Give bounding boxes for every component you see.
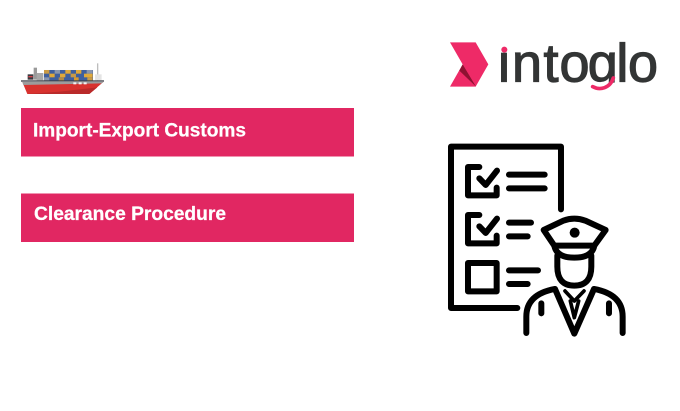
checklist row 2 — [468, 215, 531, 243]
logo: intoglo — [450, 34, 658, 97]
banner: clearance procedure — [21, 194, 354, 242]
checklist sheet — [451, 147, 561, 308]
logo mark: chevron — [450, 42, 488, 87]
officer body — [526, 289, 623, 334]
checklist row 3 — [468, 263, 538, 291]
heading line 2: Clearance Procedure — [34, 204, 226, 225]
officer face — [557, 256, 591, 286]
officer cap — [544, 219, 606, 258]
icon: customs officer with checklist — [451, 147, 623, 334]
banner: import-export customs — [21, 108, 354, 156]
heading line 1: Import-Export Customs — [33, 120, 246, 142]
checklist row 1 — [468, 167, 545, 195]
icon: container ship — [21, 63, 104, 94]
logo wordmark: intoglo — [498, 34, 658, 94]
logo accents: dot and smile — [499, 38, 617, 97]
